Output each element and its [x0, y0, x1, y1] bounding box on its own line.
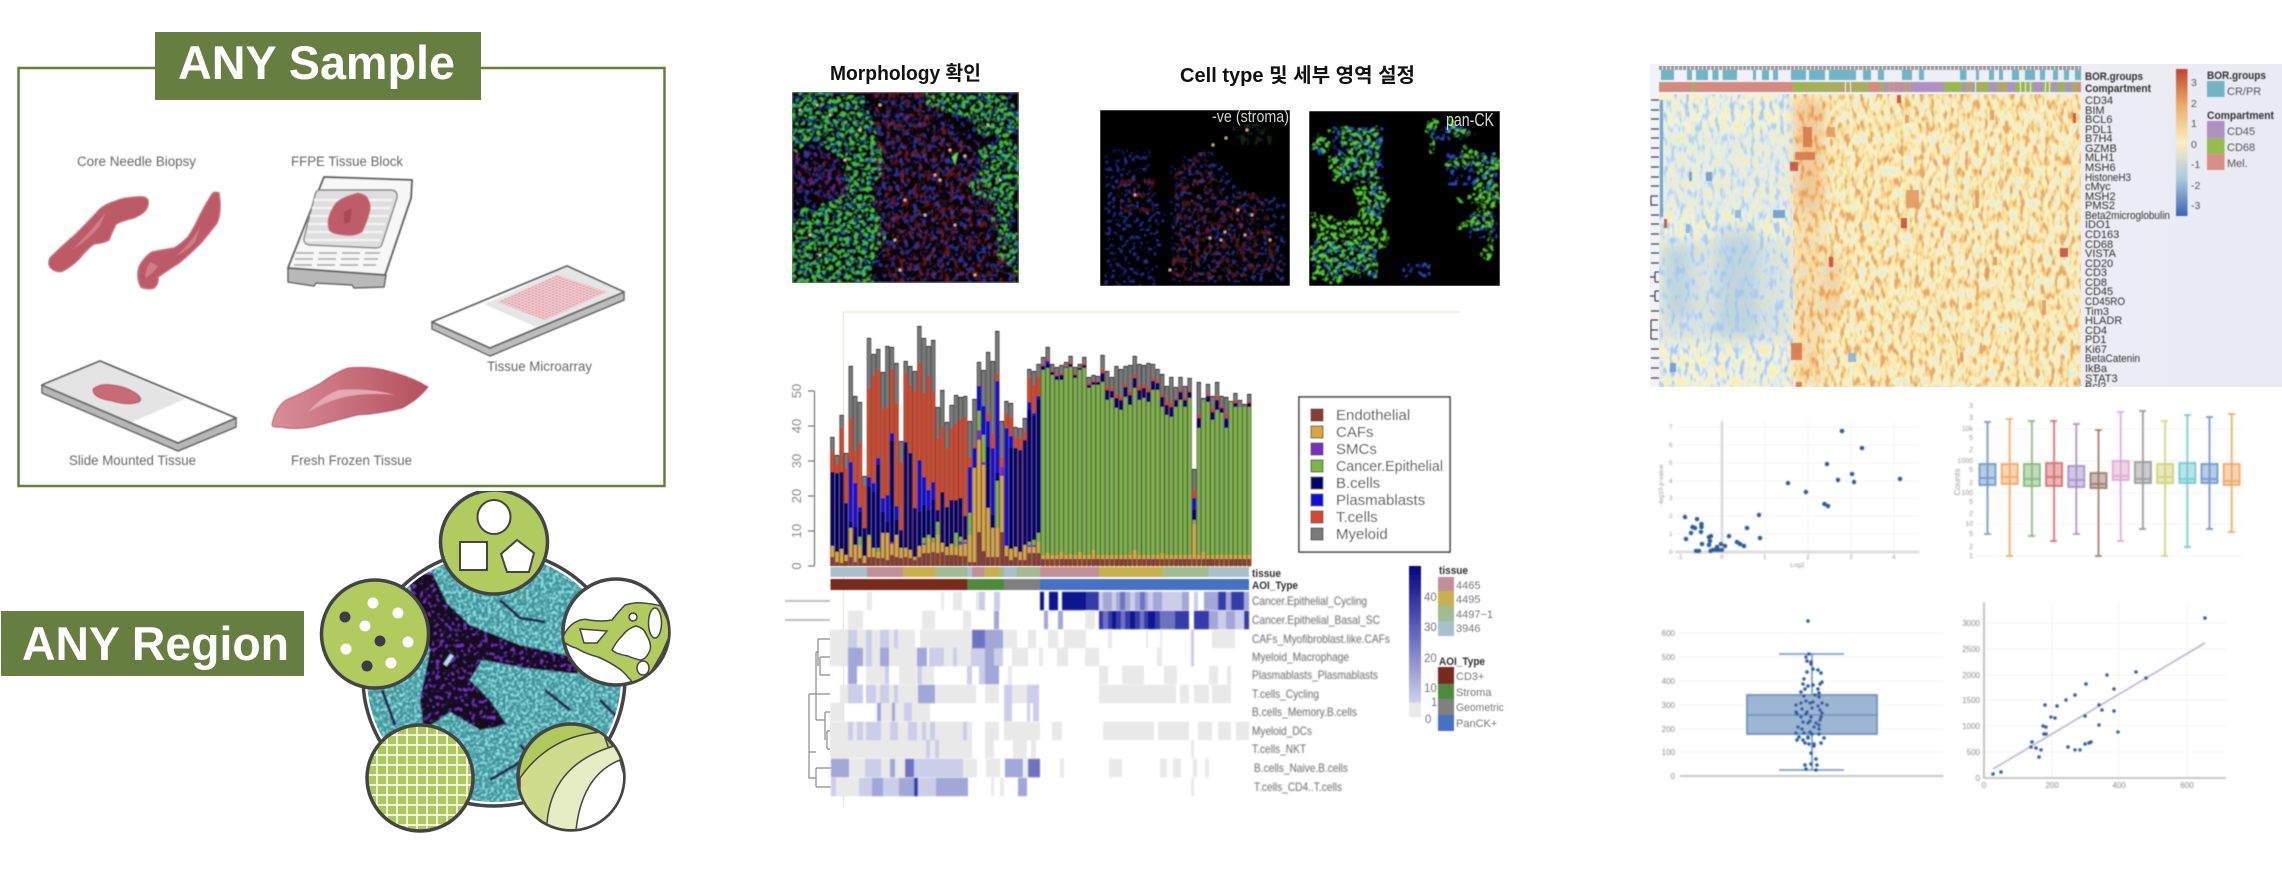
chart: volcano plot: 2 [1806, 554, 1810, 561]
chart: counts box plots: 5 [1969, 499, 1973, 506]
legend: cell types: SMCs [1336, 441, 1377, 458]
box plot glyphs [1980, 411, 2240, 556]
chart: volcano plot: 1 [1669, 531, 1673, 538]
tissue dish image [363, 550, 625, 806]
legend: tissue: 3946 [1456, 623, 1480, 635]
chart: counts box plots: Counts [1952, 469, 1962, 495]
chart: box plot with points: 300 [1662, 701, 1676, 710]
legend: BOR groups: CR/PR [2227, 86, 2261, 98]
heatmap row labels: BIM [2085, 105, 2105, 117]
heatmap row labels: Ki67 [2085, 344, 2107, 356]
heatmap row labels: STAT3 [2085, 373, 2118, 385]
sample: fresh frozen tissue [272, 367, 428, 468]
heatmap row labels: PD1 [2085, 334, 2106, 346]
chart: volcano plot: -1 [1677, 554, 1683, 561]
annotation strips: tissue [1252, 568, 1281, 580]
chart: volcano plot: 7 [1669, 424, 1673, 431]
heading: ANY Sample: ANY Sample [178, 36, 455, 89]
chart: scatter with trend line: 0 [1976, 774, 1981, 783]
chart: counts box plots: 2 [1969, 511, 1973, 518]
heatmap row labels: Bcl2 [2085, 381, 2106, 393]
heatmap row labels: IDO1 [2085, 219, 2111, 231]
legend: tissue: 4495 [1456, 594, 1480, 606]
heatmap row labels: HLADR [2085, 315, 2122, 327]
chart: scatter with trend line: 500 [1967, 748, 1981, 757]
legend: tissue: 4497−1 [1456, 609, 1493, 621]
y axis: 0 [789, 562, 804, 570]
heatmap colour scale: 0 [1425, 714, 1431, 726]
heatmap dendrogram [809, 639, 831, 787]
y axis [789, 384, 814, 570]
legend: cell types: CAFs [1336, 424, 1374, 441]
title: Morphology: Morphology 확인 [830, 62, 981, 85]
tissue strip [830, 567, 1249, 577]
heatmap row labels: CD3 [2085, 267, 2107, 279]
chart: counts box plots: 5 [1969, 467, 1973, 474]
chart: counts box plots: 1000 [1957, 458, 1973, 465]
legend: tissue: tissue [1439, 565, 1468, 577]
heatmap row labels: CD4 [2085, 325, 2107, 337]
sample: core needle biopsy: Core Needle Biopsy [77, 153, 196, 169]
legend: cell types: Plasmablasts [1336, 492, 1425, 509]
heatmap annotation bars: Compartment [2085, 83, 2151, 95]
heatmap row labels: T.cells_NKT [1252, 742, 1307, 756]
region circle: single cells [322, 580, 428, 688]
heatmap row labels: Cancer.Epithelial_Basal_SC [1252, 613, 1380, 627]
chart: volcano plot: Log2 [1790, 562, 1805, 569]
chart: volcano plot: 4 [1669, 478, 1673, 485]
chart: scatter with trend line: 2000 [1962, 671, 1981, 680]
legend: AOI type: PanCK+ [1456, 718, 1497, 730]
legend: compartment: Mel. [2227, 158, 2248, 170]
chart: counts box plots: 5 [1969, 531, 1973, 538]
y axis: 10 [789, 524, 804, 538]
legend: compartment: CD45 [2227, 126, 2255, 138]
legend: AOI type: AOI_Type [1439, 656, 1485, 668]
heatmap row labels: B.cells_Naive.B.cells [1254, 761, 1348, 775]
chart: counts box plots: 100 [1961, 490, 1973, 497]
heatmap colour scale: 1 [1431, 697, 1437, 709]
y axis: 30 [789, 454, 804, 468]
chart: counts box plots: 2 [1969, 480, 1973, 487]
heatmap row labels: CD34 [2085, 95, 2113, 107]
heatmap row labels: B7H4 [2085, 133, 2113, 145]
heading: ANY Sample [155, 32, 481, 100]
sample: slide mounted tissue [42, 361, 236, 468]
chart: scatter with trend line: 1000 [1962, 722, 1981, 731]
heatmap row labels: BetaCatenin [2085, 353, 2140, 365]
panel: cell type stacked bars and heatmap [785, 312, 1504, 807]
sample: tissue microarray [432, 266, 624, 374]
heatmap colour scale: 40 [1424, 592, 1437, 604]
heatmap background [1650, 64, 2282, 387]
legend: compartment: CD68 [2227, 142, 2255, 154]
chart: counts box plots: 2 [1969, 447, 1973, 454]
dendrogram [785, 601, 830, 620]
sample: slide mounted tissue: Slide Mounted Tissue [69, 452, 196, 468]
sample: FFPE tissue block: FFPE Tissue Block [291, 153, 404, 169]
region circle: segmented compartments [562, 579, 672, 690]
y axis: 20 [789, 489, 804, 503]
region circle: geometric shapes [440, 490, 548, 594]
panel: ANY Sample [18, 32, 664, 486]
legend: cell types: T.cells [1336, 509, 1378, 526]
heatmap colour scale: -2 [2191, 180, 2200, 192]
heatmap colour scale [1409, 566, 1437, 726]
chart: volcano plot [1658, 421, 1919, 569]
heatmap colour scale: -3 [2191, 200, 2200, 212]
heatmap row labels: T.cells_Cycling [1252, 687, 1319, 701]
chart: volcano plot: 0 [1720, 554, 1724, 561]
chart: box plot with points [1662, 621, 1943, 781]
chart: scatter with trend line: 0 [1982, 781, 1987, 790]
chart: counts box plots [1952, 403, 2243, 560]
chart: box plot with points: 400 [1662, 677, 1676, 686]
sample frame [18, 68, 664, 486]
micrograph: stroma [1100, 107, 1290, 286]
heatmap colour scale: 10 [1424, 683, 1437, 695]
y axis: 40 [789, 419, 804, 433]
legend: compartment: Compartment [2207, 110, 2274, 122]
chart: volcano plot: 6 [1669, 442, 1673, 449]
legend: cell types: Endothelial [1336, 407, 1410, 424]
heatmap annotation bars: BOR.groups [2085, 71, 2143, 83]
chart: scatter with trend line: 400 [2112, 781, 2126, 790]
heatmap row labels: T.cells_CD4..T.cells [1254, 780, 1342, 794]
legend: cell types: B.cells [1336, 475, 1380, 492]
heatmap colour scale: 3 [2191, 77, 2197, 89]
region circle: contour layers [516, 722, 626, 832]
heatmap row labels: Myeloid_Macrophage [1252, 650, 1349, 664]
white mask below heatmap [2085, 387, 2145, 393]
chart: box plot with points: 600 [1662, 629, 1676, 638]
chart: counts box plots: 1 [1969, 553, 1973, 560]
heatmap row labels: CAFs_Myofibroblast.like.CAFs [1252, 632, 1390, 646]
chart: volcano plot: 5 [1669, 460, 1673, 467]
chart: box plot with points: 500 [1662, 653, 1676, 662]
heatmap row labels [2085, 95, 2170, 393]
heatmap colour scale: 30 [1424, 622, 1437, 634]
heatmap colour scale: 0 [2191, 139, 2197, 151]
chart: counts box plots: 10k [1962, 426, 1973, 433]
y axis: 50 [789, 384, 804, 398]
heatmap row labels: MSH2 [2085, 191, 2116, 203]
heatmap: cell type scores [785, 594, 1390, 794]
legend: AOI type: Stroma [1456, 687, 1492, 699]
heatmap row labels: MSH6 [2085, 162, 2116, 174]
heatmap colour scale: 20 [1424, 653, 1437, 665]
heatmap row labels: B.cells_Memory.B.cells [1252, 705, 1357, 719]
heatmap row labels: CD8 [2085, 277, 2107, 289]
chart: scatter with trend line: 200 [2045, 781, 2059, 790]
legend: cell types: Cancer.Epithelial [1336, 458, 1443, 475]
chart: volcano plot: 3 [1849, 554, 1853, 561]
legend: AOI type: Geometric [1456, 702, 1504, 714]
BOR groups bar [1661, 70, 2081, 80]
chart: box plot with points: 200 [1662, 725, 1676, 734]
panel: protein expression heatmap [1650, 64, 2282, 393]
sample: FFPE tissue block [288, 153, 412, 288]
heatmap row labels: GZMB [2085, 143, 2117, 155]
chart: counts box plots: 2 [1969, 544, 1973, 551]
legend: BOR groups [2207, 70, 2266, 98]
chart: counts box plots: 3 [1969, 403, 1973, 410]
chart: box plot with points: 0 [1671, 772, 1676, 781]
heatmap colour scale: -1 [2191, 159, 2200, 171]
micrograph: pan-CK: pan-CK [1446, 110, 1494, 130]
chart: scatter with trend line: 2500 [1962, 645, 1981, 654]
heatmap row labels: CD68 [2085, 239, 2113, 251]
legend: compartment [2207, 110, 2274, 170]
heatmap row labels: CD20 [2085, 258, 2113, 270]
heatmap row labels: MLH1 [2085, 152, 2114, 164]
row dendrogram ticks [1650, 100, 1659, 378]
heatmap row labels: Beta2microglobulin [2085, 210, 2170, 222]
heatmap row labels: VISTA [2085, 248, 2117, 260]
chart: volcano plot: 4 [1892, 554, 1896, 561]
heatmap row labels: Tim3 [2085, 306, 2109, 318]
heatmap row labels [1252, 594, 1390, 794]
chart: scatter with trend line: 1500 [1962, 696, 1981, 705]
pale guide lines [844, 312, 1460, 807]
heatmap row labels: Myeloid_DCs [1252, 724, 1312, 738]
heatmap row labels: CD45RO [2085, 296, 2125, 308]
legend: cell types [1299, 397, 1450, 552]
chart: scatter with trend line: 3000 [1962, 619, 1981, 628]
stacked bar chart [789, 326, 1251, 570]
sample: tissue microarray: Tissue Microarray [487, 358, 592, 374]
panel: morphology and cell type images [792, 62, 1500, 286]
panel: ANY Region [1, 490, 672, 840]
compartment bar [1659, 82, 2081, 92]
legend: AOI type: CD3+ [1456, 671, 1484, 683]
chart: volcano plot: -log10 p-value [1658, 464, 1665, 506]
region circle: grid [367, 725, 473, 831]
heatmap cells [1659, 94, 2081, 387]
title: cell type: Cell type 및 세부 영역 설정 [1180, 64, 1415, 87]
legend: tissue [1438, 565, 1493, 636]
heatmap colour scale [2176, 69, 2200, 216]
chart: scatter with trend line: 600 [2180, 781, 2194, 790]
sample: fresh frozen tissue: Fresh Frozen Tissue [291, 452, 412, 468]
chart: volcano plot: 1 [1763, 554, 1767, 561]
heatmap row labels: IkBa [2085, 363, 2108, 375]
heatmap row labels: CD45 [2085, 286, 2113, 298]
chart: box plot with points: 100 [1662, 748, 1676, 757]
heatmap row labels: Cancer.Epithelial_Cycling [1252, 594, 1367, 608]
heatmap colour scale: 1 [2191, 118, 2197, 130]
sample: core needle biopsy [49, 153, 220, 289]
legend: cell types: Myeloid [1336, 526, 1388, 543]
heatmap row labels: BCL6 [2085, 114, 2113, 126]
heatmap row labels: HistoneH3 [2085, 172, 2131, 184]
heatmap row labels: Plasmablasts_Plasmablasts [1252, 668, 1378, 682]
heatmap row labels: CD163 [2085, 229, 2119, 241]
heading: ANY Region: ANY Region [22, 617, 289, 670]
legend: AOI type [1438, 656, 1504, 731]
chart: counts box plots: 5 [1969, 435, 1973, 442]
chart: scatter with trend line [1962, 602, 2226, 790]
heatmap colour scale: 2 [2191, 98, 2197, 110]
chart: volcano plot: 0 [1669, 549, 1673, 556]
annotation strips: AOI_Type [1252, 580, 1298, 592]
chart: counts box plots: 3 [1969, 415, 1973, 422]
legend: BOR groups: BOR.groups [2207, 70, 2266, 82]
legend: tissue: 4465 [1456, 580, 1480, 592]
heatmap annotation bars [1659, 68, 2151, 95]
heatmap row labels: PMS2 [2085, 200, 2115, 212]
micrograph: stroma: -ve (stroma) [1212, 107, 1289, 126]
heatmap row labels: cMyc [2085, 181, 2111, 193]
chart: volcano plot: 2 [1669, 513, 1673, 520]
micrograph: morphology [792, 92, 1019, 283]
chart: volcano plot: 3 [1669, 495, 1673, 502]
annotation strips [830, 567, 1298, 592]
bars [832, 326, 1251, 566]
AOI type strip [830, 579, 1249, 590]
heatmap row labels: PDL1 [2085, 124, 2113, 136]
chart: counts box plots: 10 [1965, 521, 1973, 528]
micrograph: pan-CK [1309, 110, 1500, 286]
